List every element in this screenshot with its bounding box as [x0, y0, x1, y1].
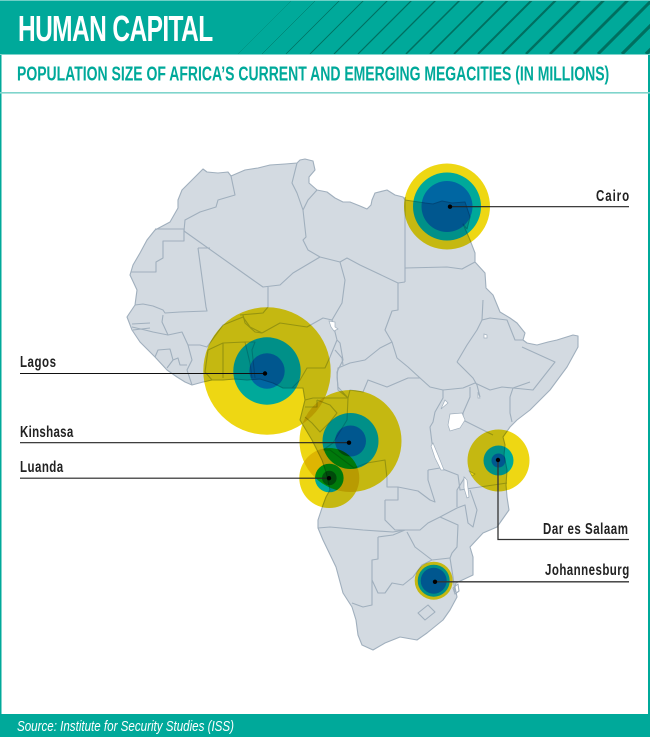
callout: Kinshasa: Kinshasa [20, 422, 73, 440]
bubble: Lagos [203, 307, 331, 435]
callout: Johannesburg: Johannesburg [545, 560, 629, 578]
bubble: Cairo [404, 164, 490, 250]
callout: Lagos [20, 352, 267, 376]
callout: Lagos: Lagos [20, 352, 56, 370]
bubble: Kinshasa [300, 390, 402, 492]
callout: Cairo [448, 186, 629, 209]
subtitle: POPULATION SIZE OF AFRICA’S CURRENT AND EMERGING MEGACITIES (IN MILLIONS) [17, 62, 609, 85]
callout: Dar es Salaam: Dar es Salaam [543, 519, 628, 537]
header banner [0, 0, 650, 54]
callout: Kinshasa [20, 422, 351, 445]
callout: Cairo: Cairo [596, 186, 629, 204]
title: HUMAN CAPITAL [18, 8, 213, 49]
bubble: Johannesburg [415, 562, 453, 600]
country borders [131, 163, 555, 620]
map of Africa [127, 159, 578, 650]
footer band [0, 714, 650, 737]
lakes [329, 321, 487, 498]
callout: Dar es Salaam [496, 458, 629, 540]
callout: Johannesburg [433, 560, 629, 584]
bubble: Luanda [299, 448, 359, 508]
continent outline [127, 159, 578, 650]
callout: Luanda [20, 457, 331, 480]
bubble: Dar es Salaam [468, 430, 530, 492]
callout: Luanda: Luanda [20, 457, 63, 475]
source note: Source: Institute for Security Studies (ISS) [17, 718, 234, 735]
